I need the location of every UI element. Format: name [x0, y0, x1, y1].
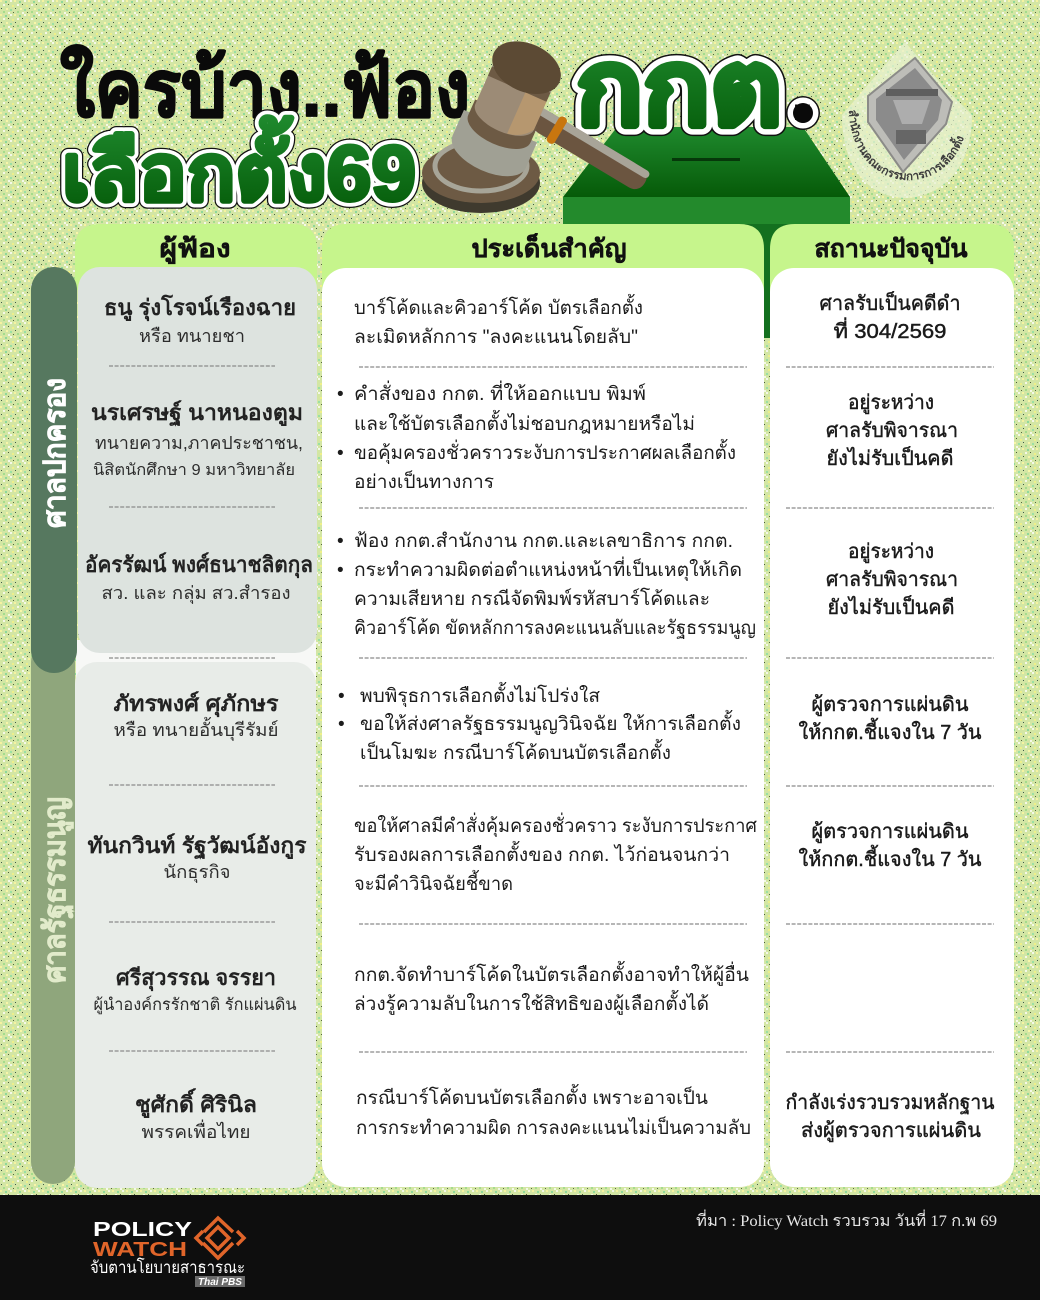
filer 2: นิสิตนักศึกษา 9 มหาวิทยาลัย: [93, 462, 295, 479]
filer 2: [91, 400, 303, 479]
filer 5: นักธุรกิจ: [164, 862, 230, 883]
panel: header filer: [75, 224, 317, 290]
logo: Policy Watch: [90, 1218, 245, 1288]
issue 6: กกต.จัดทำบาร์โค้ดในบัตรเลือกตั้งอาจทำให้ผู้อื่น: [354, 961, 749, 986]
issue 5: รับรองผลการเลือกตั้งของ กกต. ไว้ก่อนจนกว่า: [354, 841, 730, 866]
filer 6: [94, 965, 296, 1015]
status 2: อยู่ระหว่าง: [848, 392, 934, 415]
issue 5: [354, 812, 757, 895]
status 2: [826, 392, 958, 470]
status 1: ศาลรับเป็นคดีดำ: [820, 290, 960, 315]
issue 3: ความเสียหาย กรณีจัดพิมพ์รหัสบาร์โค้ดและ: [354, 587, 710, 610]
status 2: ศาลรับพิจารณา: [826, 420, 958, 442]
status 3: ยังไม่รับเป็นคดี: [828, 594, 954, 619]
status 3: ศาลรับพิจารณา: [826, 569, 958, 591]
title: election 69: เลือกตั้ง69: [62, 116, 416, 217]
status 5: ผู้ตรวจการแผ่นดิน: [812, 821, 969, 844]
heading: filer: ผู้ฟ้อง: [160, 235, 230, 265]
filer 1: หรือ ทนายชา: [139, 326, 245, 346]
panel: status column: [770, 268, 1014, 1187]
heading: key issue: ประเด็นสำคัญ: [472, 233, 626, 263]
filer 7: [135, 1088, 257, 1142]
issue 4: [338, 682, 741, 764]
heading: current status: สถานะปัจจุบัน: [814, 235, 968, 265]
filer 5: [88, 833, 307, 883]
dividers: [109, 366, 994, 1052]
title: ECT in green: กกต: [576, 31, 782, 147]
filer 4: [114, 691, 279, 741]
status 5: ให้กกต.ชี้แจงใน 7 วัน: [798, 845, 982, 871]
issue 7: กรณีบาร์โค้ดบนบัตรเลือกตั้ง เพราะอาจเป็น: [356, 1084, 708, 1109]
seal: election commission: สำนักงานคณะกรรมการการเลือกตั้ง: [848, 110, 964, 180]
logo: Policy Watch: WATCH: [93, 1239, 187, 1261]
issue 4: ขอให้ส่งศาลรัฐธรรมนูญวินิจฉัย ให้การเลือกตั้ง: [360, 710, 741, 735]
issue 7: [356, 1084, 751, 1139]
issue 4: •: [338, 714, 345, 735]
issue 3: •: [337, 560, 344, 581]
status 4: ผู้ตรวจการแผ่นดิน: [812, 694, 969, 717]
filer 7: ชูศักดิ์ ศิรินิล: [135, 1088, 257, 1119]
filer 1: ธนู รุ่งโรจน์เรืองฉาย: [104, 294, 296, 322]
status 4: ให้กกต.ชี้แจงใน 7 วัน: [798, 718, 982, 744]
title: who is suing: ใครบ้าง..ฟ้อง: [60, 44, 470, 133]
issue 2: •: [337, 384, 344, 405]
icon: ballot box: [563, 127, 850, 338]
filer 1: [104, 294, 296, 346]
label: administrative court: ศาลปกครอง: [39, 378, 72, 528]
filer 6: ศรีสุวรรณ จรรยา: [116, 965, 276, 992]
status 5: [798, 821, 982, 871]
panel: administrative filers: [78, 267, 317, 653]
issue 1: ละเมิดหลักการ "ลงคะแนนโดยลับ": [354, 325, 638, 348]
issue 2: คำสั่งของ กกต. ที่ให้ออกแบบ พิมพ์: [354, 380, 646, 405]
panel: administrative court side pill: [31, 267, 77, 673]
status 2: ยังไม่รับเป็นคดี: [826, 445, 954, 470]
filer 3: อัครรัฒน์ พงศ์ธนาชลิตกุล: [85, 552, 313, 579]
issue 3: [337, 531, 756, 639]
issue 2: ขอคุ้มครองชั่วคราวระงับการประกาศผลเลือกตั้ง: [354, 439, 736, 465]
logo: Policy Watch: POLICY: [93, 1219, 193, 1241]
filer 4: หรือ ทนายอั้นบุรีรัมย์: [114, 717, 278, 741]
status 4: [798, 694, 982, 744]
issue 2: [337, 380, 736, 493]
status 7: กำลังเร่งรวบรวมหลักฐาน: [786, 1092, 995, 1114]
panel: constitutional court side pill: [31, 640, 75, 1184]
title: ECT in green: กกต: [576, 31, 782, 147]
footer band: [0, 1195, 1040, 1300]
issue 3: •: [337, 531, 344, 552]
status 1: [820, 290, 960, 343]
panel: header issue: [322, 224, 764, 290]
issue 2: •: [337, 443, 344, 464]
issue 4: เป็นโมฆะ กรณีบาร์โค้ดบนบัตรเลือกตั้ง: [360, 739, 671, 764]
filer 2: นรเศรษฐ์ นาหนองตูม: [91, 400, 303, 427]
filer 6: ผู้นำองค์กรรักชาติ รักแผ่นดิน: [94, 995, 296, 1015]
panel: constitutional filers: [75, 662, 316, 1188]
status 3: อยู่ระหว่าง: [848, 541, 934, 564]
filer 3: สว. และ กลุ่ม สว.สำรอง: [102, 583, 290, 604]
status 7: [786, 1092, 995, 1143]
title: election 69: เลือกตั้ง69: [62, 116, 416, 217]
issue 1: บาร์โค้ดและคิวอาร์โค้ด บัตรเลือกตั้ง: [354, 294, 643, 319]
status 3: [826, 541, 958, 619]
filer 2: ทนายความ,ภาคประชาชน,: [95, 433, 303, 453]
panel: header status: [770, 224, 1014, 290]
issue 6: [354, 961, 749, 1015]
title: ECT in green: กกต: [576, 31, 782, 147]
filer 5: ทันกวินท์ รัฐวัฒน์อังกูร: [88, 833, 307, 860]
panel: issues column: [322, 268, 764, 1187]
icon: gavel: [422, 29, 652, 213]
status 1: ที่ 304/2569: [834, 317, 946, 343]
issue 3: คิวอาร์โค้ด ขัดหลักการลงคะแนนลับและรัฐธรรมนูญ: [354, 616, 756, 639]
label: constitutional court: ศาลรัฐธรรมนูญ: [39, 797, 75, 983]
panel: filer column gap: [76, 640, 316, 680]
issue 3: ฟ้อง กกต.สำนักงาน กกต.และเลขาธิการ กกต.: [354, 531, 733, 552]
filer 3: [85, 552, 313, 604]
filer 7: พรรคเพื่อไทย: [142, 1119, 250, 1142]
source note: ที่มา : Policy Watch รวบรวม วันที่ 17 ก.พ 69: [696, 1209, 997, 1230]
seal: election commission: [842, 42, 972, 198]
issue 2: อย่างเป็นทางการ: [354, 469, 494, 493]
issue 7: การกระทำความผิด การลงคะแนนไม่เป็นความลับ: [356, 1115, 751, 1139]
issue 5: ขอให้ศาลมีคำสั่งคุ้มครองชั่วคราว ระงับการประกาศ: [354, 812, 757, 838]
status 7: ส่งผู้ตรวจการแผ่นดิน: [801, 1120, 981, 1143]
issue 4: พบพิรุธการเลือกตั้งไม่โปร่งใส: [360, 682, 600, 708]
issue 5: จะมีคำวินิจฉัยชี้ขาด: [354, 870, 513, 895]
issue 2: และใช้บัตรเลือกตั้งไม่ชอบกฎหมายหรือไม่: [354, 410, 695, 435]
logo: Policy Watch: Thai PBS: [198, 1277, 242, 1288]
issue 3: กระทำความผิดต่อตำแหน่งหน้าที่เป็นเหตุให้เกิด: [354, 556, 742, 582]
issue 1: [354, 294, 643, 348]
title: ECT in green: .: [788, 27, 817, 143]
filer 4: ภัทรพงศ์ ศุภักษร: [114, 691, 279, 718]
issue 4: •: [338, 686, 345, 707]
title: election 69: เลือกตั้ง69: [62, 116, 416, 217]
logo: Policy Watch: จับตานโยบายสาธารณะ: [90, 1257, 245, 1277]
issue 6: ล่วงรู้ความลับในการใช้สิทธิของผู้เลือกตั้งได้: [354, 990, 709, 1015]
